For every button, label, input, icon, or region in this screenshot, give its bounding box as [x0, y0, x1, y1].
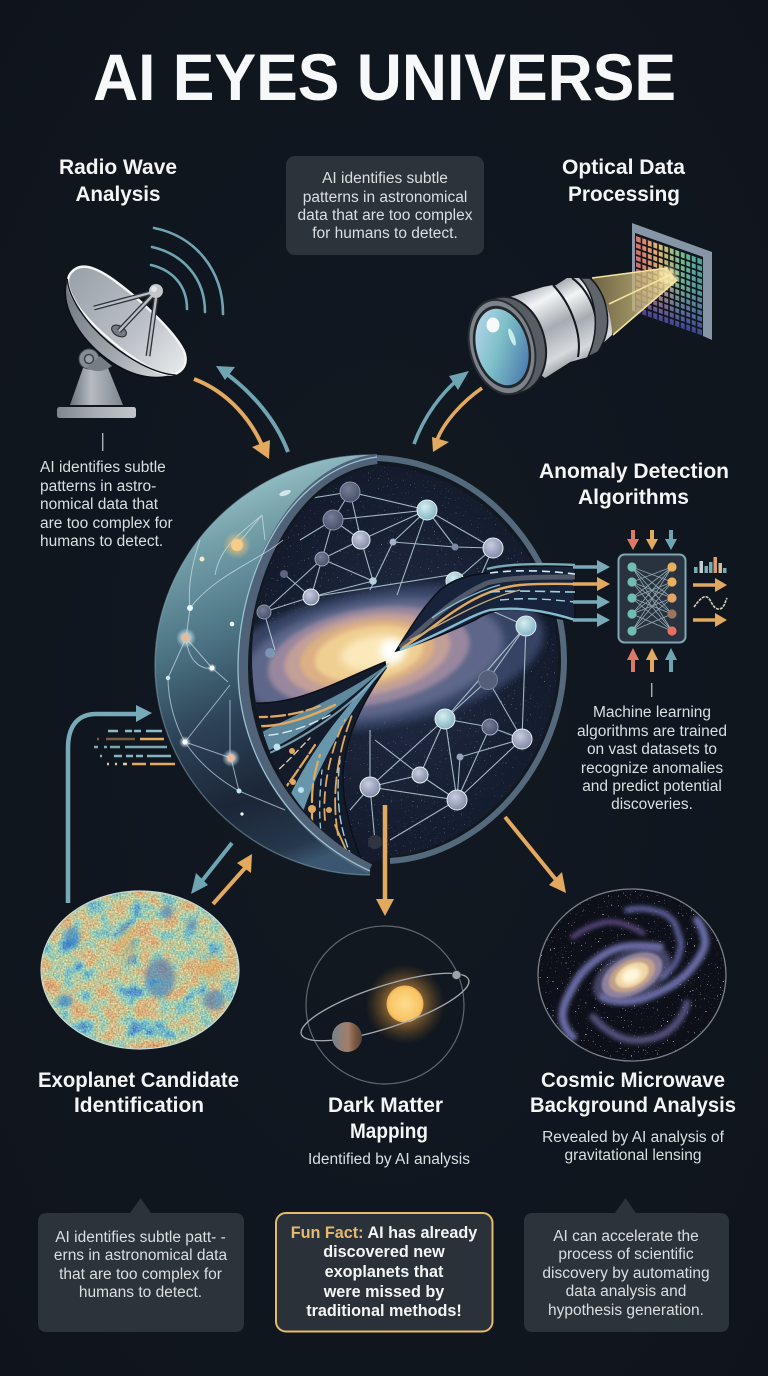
text: anomaly description: Machine learning — [593, 704, 711, 721]
callout: bottom right: data analysis and — [566, 1283, 686, 1300]
heading: cosmic microwave background analysis — [530, 1069, 736, 1117]
upper stream lines — [400, 564, 575, 650]
shell stars and network — [166, 489, 291, 816]
heading: optical data processing — [562, 156, 685, 206]
panel: central sphere — [155, 455, 575, 875]
callout: bottom left: erns in astronomical data — [54, 1247, 227, 1264]
callout: fun fact — [276, 1213, 492, 1332]
connector line — [102, 433, 103, 451]
icon: output waveform — [694, 597, 727, 609]
connector line — [651, 683, 652, 697]
icon: detector grid — [632, 223, 712, 340]
arrow: exoplanet to sphere (orange) — [213, 854, 252, 904]
text: cosmic microwave caption: Revealed by AI analysis of — [542, 1129, 725, 1146]
text: dish description — [40, 459, 173, 550]
arrows: optical to sphere — [414, 371, 482, 452]
text: anomaly description: recognize anomalies — [581, 760, 723, 777]
text: dish description: are too complex for — [40, 515, 173, 532]
arrow: sphere to cosmic microwave — [505, 817, 566, 893]
callout: top description — [286, 156, 484, 255]
callout: bottom right: hypothesis generation. — [548, 1302, 704, 1319]
heading: optical data processing: Processing — [568, 183, 680, 206]
callout: fun fact: Fun Fact: AI has already — [291, 1224, 477, 1242]
image: cosmic microwave map — [41, 891, 239, 1049]
arrows: into neural box — [573, 560, 610, 627]
heading: radio wave analysis: Radio Wave — [59, 156, 177, 179]
callout: bottom left: AI identifies subtle patt- - — [55, 1229, 226, 1246]
title: AI EYES UNIVERSE — [93, 40, 676, 114]
heading: exoplanet candidate identification: Exoplanet Candidate — [38, 1069, 239, 1092]
opening interior — [252, 465, 558, 863]
text: anomaly description: algorithms are trained — [577, 723, 727, 740]
heading: anomaly detection: Algorithms — [578, 486, 689, 509]
heading: optical data processing: Optical Data — [562, 156, 685, 179]
arrow: dish to sphere — [194, 366, 288, 459]
rim — [243, 459, 377, 869]
right rim — [377, 458, 564, 861]
arrow: exoplanet feedback loop — [68, 705, 152, 903]
heading: exoplanet candidate identification — [38, 1069, 239, 1117]
heading: anomaly detection — [539, 460, 729, 509]
icon: telescope lens — [459, 278, 612, 402]
heading: radio wave analysis: Analysis — [76, 183, 160, 206]
galaxy — [252, 582, 548, 734]
callout: bottom right — [524, 1198, 729, 1332]
text: anomaly description: and predict potential — [582, 778, 722, 795]
callout: fun fact: traditional methods! — [306, 1302, 462, 1320]
network nodes — [257, 482, 536, 849]
text: cosmic microwave caption — [542, 1129, 725, 1164]
callout: bottom left — [38, 1198, 244, 1332]
callout: bottom right: discovery by automating — [542, 1265, 710, 1282]
data stream lines: left input — [94, 731, 175, 764]
text: cosmic microwave caption: gravitational lensing — [564, 1147, 702, 1164]
callout: bottom right: AI can accelerate the — [553, 1228, 699, 1245]
shell edge highlight — [155, 455, 377, 875]
callout: top description: patterns in astronomical — [303, 189, 467, 206]
arrow: sphere to dark matter — [376, 805, 394, 916]
callout: top description: data that are too complex — [298, 207, 473, 224]
heading: dark matter mapping — [328, 1094, 443, 1143]
icon: dark matter orbit — [295, 926, 475, 1084]
text: dish description: AI identifies subtle — [40, 459, 166, 476]
callout: fun fact: exoplanets that — [325, 1263, 444, 1281]
icon: light beam — [592, 267, 677, 335]
callout: fun fact: discovered new — [323, 1243, 445, 1261]
arrows: top of neural box — [627, 530, 677, 550]
network edges — [264, 492, 526, 842]
arrow: sphere to exoplanet (teal) — [191, 843, 232, 894]
heading: cosmic microwave background analysis: Cosmic Microwave — [541, 1069, 725, 1092]
callout: top description: for humans to detect. — [312, 225, 458, 242]
heading: anomaly detection: Anomaly Detection — [539, 460, 729, 483]
text: anomaly description: on vast datasets to — [587, 741, 717, 758]
icon: output bar chart — [694, 557, 726, 573]
text: dark matter caption: Identified by AI analysis — [308, 1151, 470, 1168]
heading: exoplanet candidate identification: Identification — [74, 1094, 204, 1117]
upper data stream — [396, 566, 575, 651]
icon: neural network box — [618, 554, 686, 642]
arrow: output top — [693, 578, 727, 592]
arrow: output bottom — [693, 613, 727, 627]
callout: top description: AI identifies subtle — [322, 170, 448, 187]
text: dish description: humans to detect. — [40, 533, 163, 550]
text: anomaly description — [577, 704, 727, 813]
text: dish description: nomical data that — [40, 496, 159, 513]
callout: fun fact: were missed by — [323, 1283, 444, 1301]
icon: radio dish — [43, 255, 198, 418]
sphere shell — [155, 455, 377, 875]
heading: dark matter mapping: Dark Matter — [328, 1094, 443, 1117]
callout: bottom right: process of scientific — [558, 1246, 694, 1263]
interior content — [252, 466, 558, 861]
text: anomaly description: discoveries. — [611, 796, 693, 813]
lower data stream — [256, 661, 387, 858]
icon: radio waves — [151, 228, 223, 314]
callout: bottom left: humans to detect. — [79, 1284, 202, 1301]
heading: cosmic microwave background analysis: Background Analysis — [530, 1094, 736, 1117]
callout: bottom left: that are too complex for — [59, 1266, 222, 1283]
arrows: bottom of neural box — [627, 648, 677, 672]
rim highlight — [238, 457, 377, 871]
text: dish description: patterns in astro- — [40, 478, 156, 495]
heading: radio wave analysis — [59, 156, 177, 206]
heading: dark matter mapping: Mapping — [350, 1120, 428, 1143]
image: spiral galaxy — [536, 887, 728, 1063]
lower stream ribbons — [253, 664, 388, 858]
